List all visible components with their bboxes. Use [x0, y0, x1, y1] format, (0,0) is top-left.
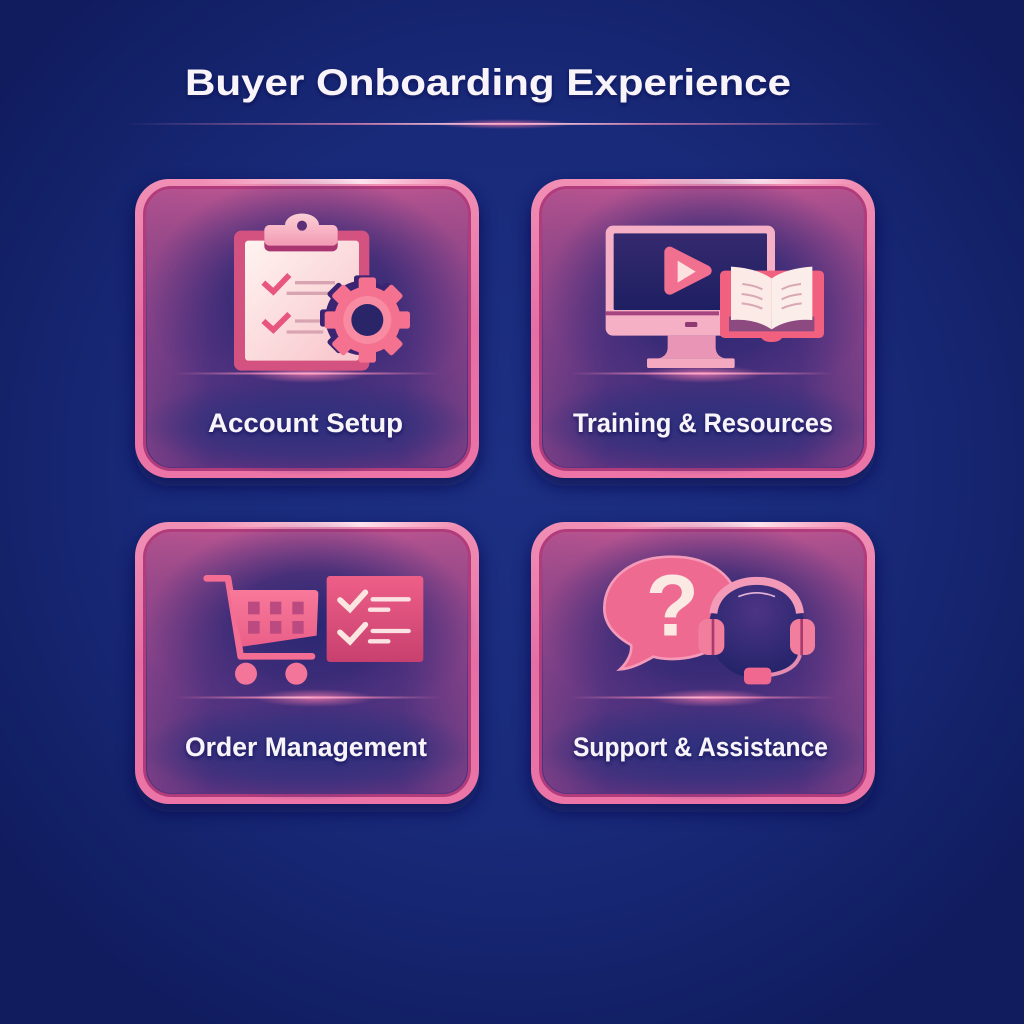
label: Support & Assistance: [573, 732, 828, 762]
divider: [175, 365, 440, 383]
title rule: [125, 119, 885, 129]
label: Account Setup: [208, 408, 403, 438]
divider: [570, 365, 835, 383]
divider: [175, 689, 440, 707]
title: Buyer Onboarding Experience: [185, 62, 791, 103]
panel: order management: [135, 520, 479, 812]
icon: monitor with play button and open book: [606, 226, 824, 368]
divider: [570, 689, 835, 707]
icon: clipboard with gear: [234, 213, 410, 371]
label: Training & Resources: [573, 408, 833, 438]
label: Order Management: [185, 732, 427, 762]
panel: support and assistance: [531, 520, 875, 812]
panel: account setup: [135, 176, 479, 486]
panel: training and resources: [531, 173, 875, 486]
icon: shopping cart and checklist: [207, 576, 423, 685]
icon: question speech bubble and headset: [604, 557, 815, 684]
question mark: ?: [646, 557, 699, 655]
